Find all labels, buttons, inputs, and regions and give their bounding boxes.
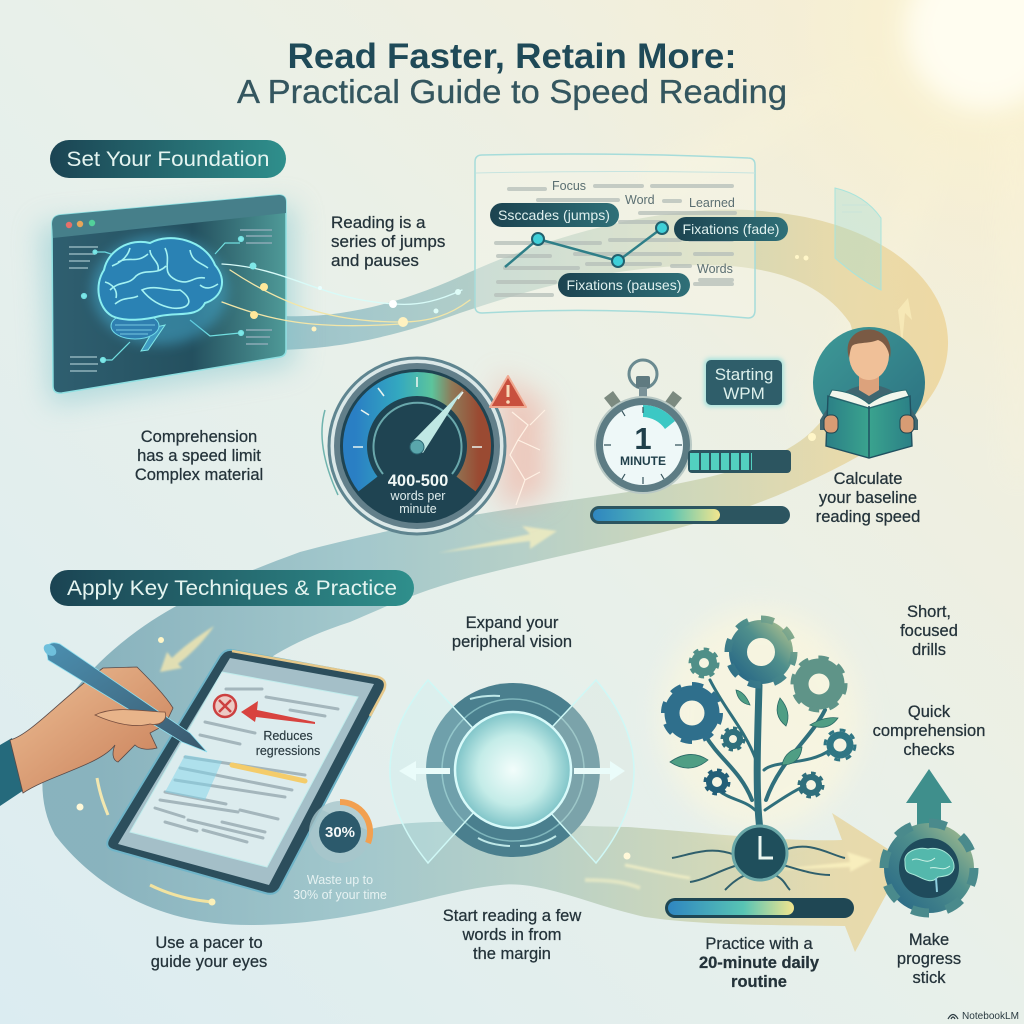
speedometer: words per bbox=[391, 489, 445, 503]
heading: Apply Key Techniques and Practice bbox=[50, 570, 414, 606]
text: short drills: focused bbox=[900, 622, 958, 640]
label: starting WPM bbox=[704, 358, 784, 407]
label: starting WPM: WPM bbox=[723, 384, 765, 403]
donut: 30 percent: 30% bbox=[325, 824, 355, 841]
panel: eye movement document bbox=[475, 154, 788, 318]
text: expand peripheral vision: peripheral vision bbox=[452, 633, 572, 651]
small gears bbox=[690, 649, 855, 797]
heading: Apply Key Techniques and Practice: Apply Key Techniques & Practice bbox=[67, 577, 397, 600]
text: Reading is a series of jumps and pauses: Reading is a bbox=[331, 213, 426, 232]
hand with pen bbox=[0, 642, 207, 806]
panel: brain screen bbox=[40, 195, 295, 405]
small brain bbox=[905, 848, 954, 892]
label: fixations fade bbox=[674, 217, 788, 241]
document words: Words bbox=[697, 262, 733, 276]
label: fixations pauses bbox=[558, 273, 690, 297]
heading: Set Your Foundation: Set Your Foundation bbox=[66, 148, 270, 171]
text: make progress stick: progress bbox=[897, 950, 961, 968]
stopwatch bbox=[595, 360, 691, 493]
text: expand peripheral vision: Expand your bbox=[466, 614, 558, 632]
text: make progress stick: Make bbox=[909, 931, 949, 949]
document words: Focus bbox=[552, 179, 586, 193]
text: comprehension: has a speed limit bbox=[137, 447, 261, 465]
needle bbox=[410, 390, 463, 454]
watermark: NotebookLM: NotebookLM bbox=[962, 1010, 1019, 1022]
text: comprehension checks: checks bbox=[903, 741, 955, 759]
text: short drills: Short, bbox=[907, 603, 951, 621]
text: practice routine: 20-minute daily bbox=[699, 954, 820, 972]
text: calculate baseline: reading speed bbox=[816, 508, 920, 526]
icon: peripheral vision ring bbox=[390, 680, 634, 863]
tablet bbox=[107, 650, 385, 894]
donut: 30 percent bbox=[309, 801, 371, 863]
central lens bbox=[455, 712, 571, 828]
label: fixations pauses: Fixations (pauses) bbox=[566, 277, 682, 293]
text: start reading: Start reading a few bbox=[443, 907, 581, 925]
text: short drills: drills bbox=[912, 641, 946, 659]
glass bezel bbox=[118, 658, 374, 885]
heading: Set Your Foundation bbox=[50, 140, 286, 178]
red warning glow bbox=[498, 375, 548, 510]
title line 2: A Practical Guide to Speed Reading bbox=[237, 73, 787, 110]
text: calculate baseline: Calculate bbox=[834, 470, 902, 488]
label: saccades bbox=[490, 203, 619, 227]
sleeve bbox=[0, 738, 24, 806]
flowing ribbon path bbox=[42, 209, 948, 952]
window dots bbox=[66, 220, 95, 228]
text: reduces regressions: Reduces bbox=[263, 729, 313, 743]
pen bbox=[46, 643, 207, 752]
regression arrow bbox=[214, 695, 315, 724]
clock bbox=[733, 826, 787, 880]
hand bbox=[10, 667, 173, 793]
text: use a pacer: guide your eyes bbox=[151, 953, 267, 971]
stopwatch number: 1 bbox=[634, 421, 652, 456]
icon: glowing brain bbox=[92, 235, 228, 351]
label: fixations fade: Fixations (fade) bbox=[682, 221, 780, 237]
document text lines bbox=[496, 186, 735, 295]
label: saccades: Ssccades (jumps) bbox=[498, 207, 610, 223]
text: make progress stick: stick bbox=[912, 969, 946, 987]
text: start reading: the margin bbox=[473, 945, 551, 963]
right vision fan bbox=[512, 680, 634, 863]
text: waste time: Waste up to bbox=[307, 873, 373, 887]
left vision fan bbox=[390, 680, 512, 863]
neural streams bbox=[222, 262, 470, 332]
pacer highlight bbox=[232, 765, 305, 781]
segmented progress bar bbox=[688, 450, 791, 473]
gear: right bbox=[793, 658, 845, 710]
branches bbox=[705, 680, 830, 830]
gauge colour arc bbox=[355, 384, 479, 484]
icon: warning triangle bbox=[490, 376, 526, 407]
outward arrows bbox=[399, 761, 450, 781]
icon: tree of gears bbox=[660, 610, 860, 890]
document words: Learned bbox=[689, 196, 735, 210]
text: comprehension: Complex material bbox=[135, 466, 263, 484]
text: waste time: 30% of your time bbox=[293, 888, 387, 902]
icon: brain gear bbox=[884, 823, 974, 913]
sun bbox=[640, 0, 1024, 480]
icon: person reading bbox=[813, 327, 925, 458]
speedometer: minute bbox=[399, 502, 437, 516]
text: Reading is a series of jumps and pauses: series of jumps bbox=[331, 232, 445, 251]
ribbon arrows and sparkles bbox=[76, 255, 912, 906]
ticks bbox=[353, 377, 482, 447]
arrow: up bbox=[906, 769, 952, 835]
title line 1: Read Faster, Retain More: bbox=[288, 37, 736, 76]
gauge readout: 400-500 bbox=[388, 472, 448, 490]
callout lines bbox=[69, 230, 272, 371]
text: practice routine: Practice with a bbox=[705, 935, 813, 953]
gear: left bbox=[664, 685, 720, 741]
text: reduces regressions: regressions bbox=[256, 744, 320, 758]
title bbox=[237, 37, 787, 110]
text: comprehension checks: Quick bbox=[908, 703, 950, 721]
text: use a pacer: Use a pacer to bbox=[155, 934, 263, 952]
text: practice routine: routine bbox=[731, 973, 787, 991]
saccade line chart bbox=[505, 222, 668, 267]
crown bbox=[604, 360, 682, 408]
stopwatch label: MINUTE bbox=[620, 454, 666, 468]
text: calculate baseline: your baseline bbox=[819, 489, 917, 507]
text: Reading is a series of jumps and pauses: and pauses bbox=[331, 251, 419, 270]
roots bbox=[672, 847, 845, 890]
text: start reading: words in from bbox=[461, 926, 562, 944]
text: comprehension: Comprehension bbox=[141, 428, 257, 446]
book bbox=[826, 396, 912, 458]
icon: small curved page bbox=[835, 188, 881, 290]
document words: Word bbox=[625, 193, 655, 207]
leaves bbox=[670, 690, 838, 768]
text: comprehension checks: comprehension bbox=[873, 722, 985, 740]
label: starting WPM: Starting bbox=[715, 365, 773, 384]
elapsed wedge bbox=[643, 405, 675, 429]
document words bbox=[552, 179, 735, 276]
speedometer bbox=[322, 358, 548, 534]
timed progress bar bbox=[590, 506, 790, 524]
stream nodes bbox=[250, 262, 461, 332]
reading lines bbox=[155, 689, 338, 842]
daily progress bar bbox=[665, 898, 854, 918]
gear: top bbox=[728, 619, 794, 685]
thumb bbox=[95, 710, 166, 726]
tablet screen bbox=[130, 672, 358, 867]
